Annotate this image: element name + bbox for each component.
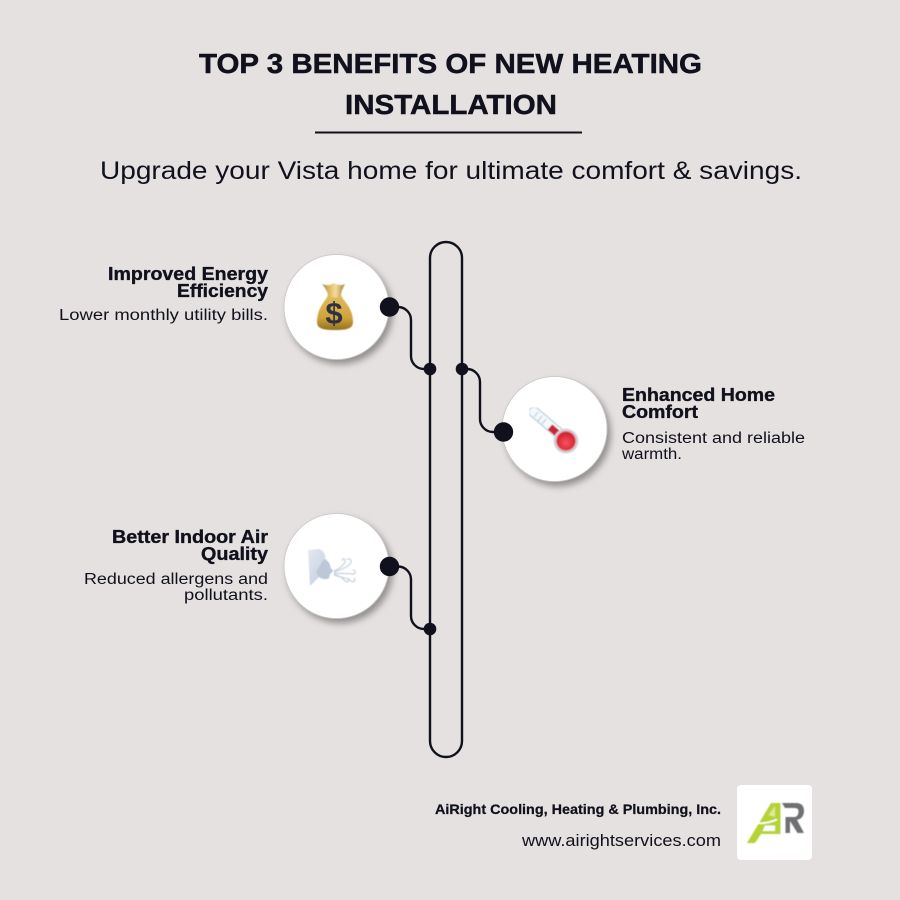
connector (462, 369, 504, 432)
subtitle: Upgrade your Vista home for ultimate comfort & savings. (100, 157, 802, 185)
icon circle: money bag (284, 254, 389, 360)
node (380, 297, 399, 317)
icon circle: blowing face (284, 514, 389, 618)
title: TOP 3 BENEFITS OF NEW HEATING (199, 48, 702, 79)
icon circle: thermometer (502, 376, 607, 482)
text: air quality: Quality (201, 544, 268, 564)
connector (390, 566, 430, 629)
text: air quality: pollutants. (184, 587, 268, 604)
junction (424, 623, 436, 635)
node (494, 422, 513, 442)
text: air quality: Reduced allergens and (84, 571, 268, 588)
logo (737, 785, 812, 860)
icon circle: money bag: $ (325, 296, 343, 330)
text: air quality: Better Indoor Air (112, 527, 268, 547)
node (380, 557, 399, 576)
junction (456, 363, 468, 375)
footer company text: AiRight Cooling, Heating & Plumbing, Inc. (435, 801, 721, 817)
connector (390, 307, 430, 369)
central pill timeline (430, 242, 462, 757)
text: energy efficiency: Lower monthly utility bills. (59, 307, 268, 324)
text: home comfort (621, 385, 805, 463)
text: home comfort: warmth. (621, 446, 682, 463)
title: INSTALLATION (345, 89, 557, 120)
text: home comfort: Comfort (622, 402, 698, 422)
panel: improved energy efficiency (59, 254, 436, 375)
title (199, 48, 702, 120)
text: home comfort: Enhanced Home (622, 385, 775, 405)
footer company text: www.airightservices.com (521, 832, 721, 850)
footer company text (435, 801, 721, 850)
text: air quality (84, 527, 268, 604)
text: energy efficiency (59, 264, 268, 324)
text: energy efficiency: Improved Energy (108, 264, 268, 284)
text: home comfort: Consistent and reliable (622, 430, 805, 447)
panel: enhanced home comfort (456, 363, 805, 482)
junction (424, 363, 436, 375)
text: energy efficiency: Efficiency (177, 281, 268, 301)
panel: better indoor air quality (84, 514, 436, 635)
